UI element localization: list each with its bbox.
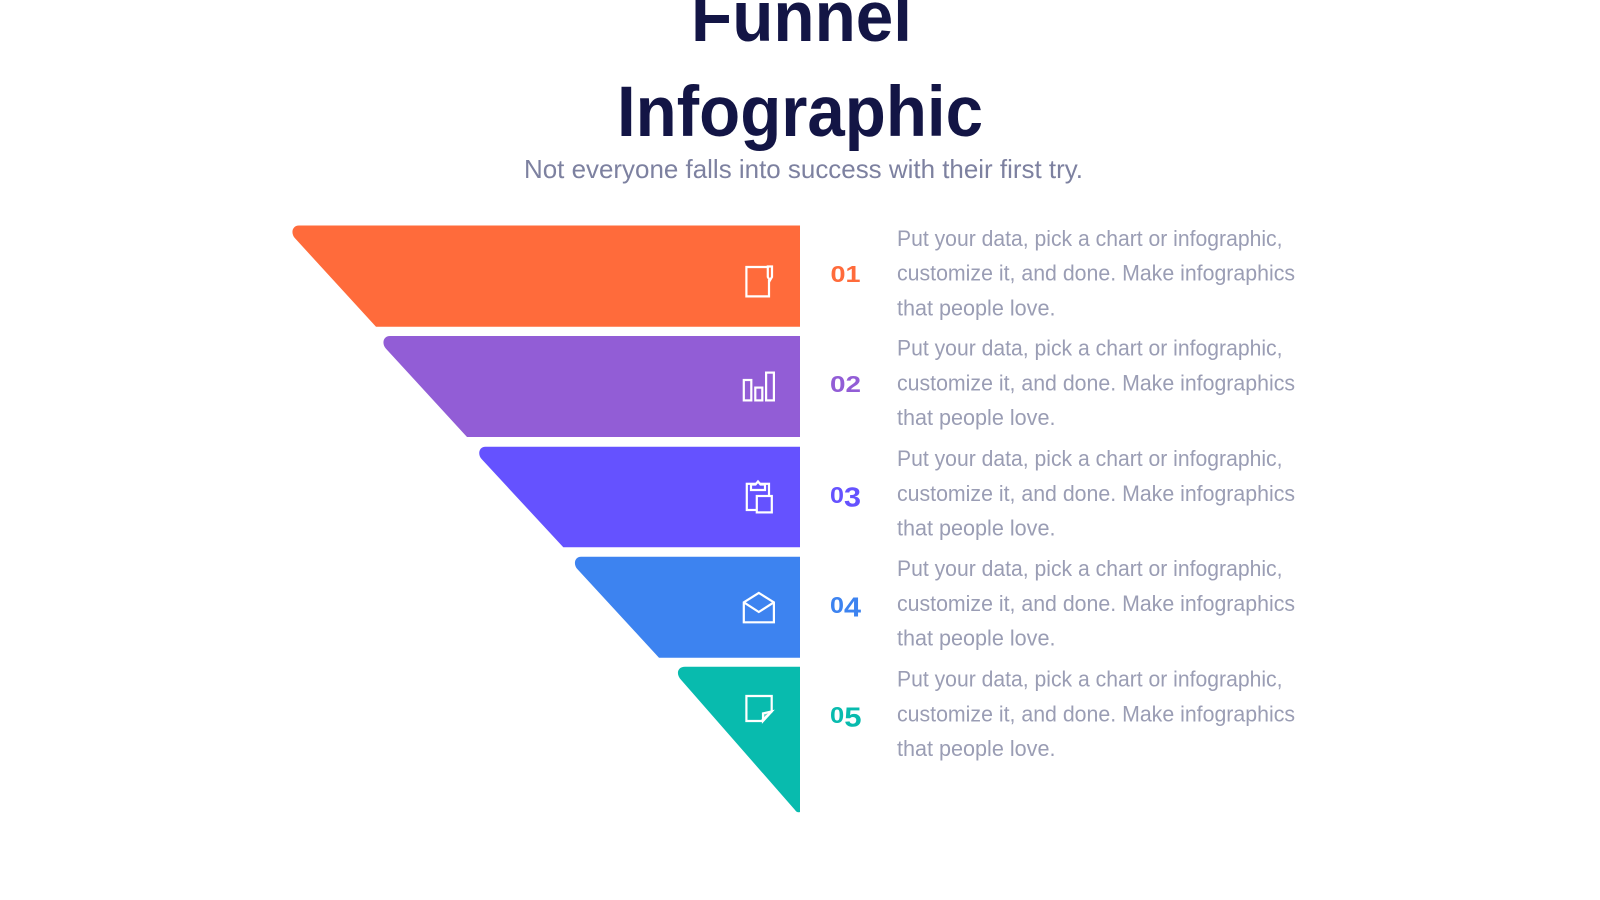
description 4: customize it, and done. Make infographics <box>897 591 1295 616</box>
description 4: Put your data, pick a chart or infographic, <box>897 556 1282 581</box>
band 2 <box>383 336 800 437</box>
description 4 <box>897 556 1295 650</box>
icon: document with bookmark <box>746 266 772 296</box>
subtitle: Not everyone falls into success with their first try. <box>524 154 1083 184</box>
icon: clipboards <box>747 482 772 512</box>
funnel step 5 <box>678 666 1295 812</box>
number 03: 0 <box>830 482 843 508</box>
band 3 <box>479 447 800 547</box>
number 05: 0 <box>830 702 843 728</box>
number 04: 4 <box>844 592 861 623</box>
description 1: Put your data, pick a chart or infographic, <box>897 226 1282 251</box>
description 1: that people love. <box>897 295 1056 320</box>
description 5: Put your data, pick a chart or infographic, <box>897 666 1282 692</box>
description 3: customize it, and done. Make infographics <box>897 481 1295 506</box>
description 2: that people love. <box>897 405 1056 430</box>
description 4: that people love. <box>897 626 1056 650</box>
description 1 <box>897 226 1295 320</box>
title <box>617 0 983 152</box>
description 3: that people love. <box>897 516 1056 540</box>
description 3: Put your data, pick a chart or infographic, <box>897 446 1282 471</box>
description 1: customize it, and done. Make infographics <box>897 261 1295 286</box>
band 5 <box>678 667 800 812</box>
band 4 <box>575 557 800 658</box>
description 5: customize it, and done. Make infographics <box>897 702 1295 726</box>
band 1 <box>292 226 800 327</box>
title: Infographic <box>617 73 983 152</box>
number 02: 02 <box>830 371 861 397</box>
description 5 <box>897 666 1295 761</box>
funnel step 2 <box>383 336 1295 437</box>
number 01: 01 <box>830 261 861 287</box>
description 3 <box>897 446 1295 540</box>
number 03: 3 <box>844 482 861 513</box>
description 5: that people love. <box>897 736 1056 761</box>
number 05: 5 <box>844 702 862 733</box>
description 2: customize it, and done. Make infographics <box>897 370 1295 396</box>
funnel step 3 <box>479 446 1295 547</box>
icon: sticky note <box>746 696 772 721</box>
icon: bar chart <box>744 373 774 400</box>
number 04: 0 <box>830 592 843 618</box>
funnel step 1 <box>292 226 1295 327</box>
funnel step 4 <box>575 556 1295 658</box>
icon: open envelope <box>744 593 774 622</box>
description 2 <box>897 336 1295 430</box>
description 2: Put your data, pick a chart or infographic, <box>897 336 1282 360</box>
